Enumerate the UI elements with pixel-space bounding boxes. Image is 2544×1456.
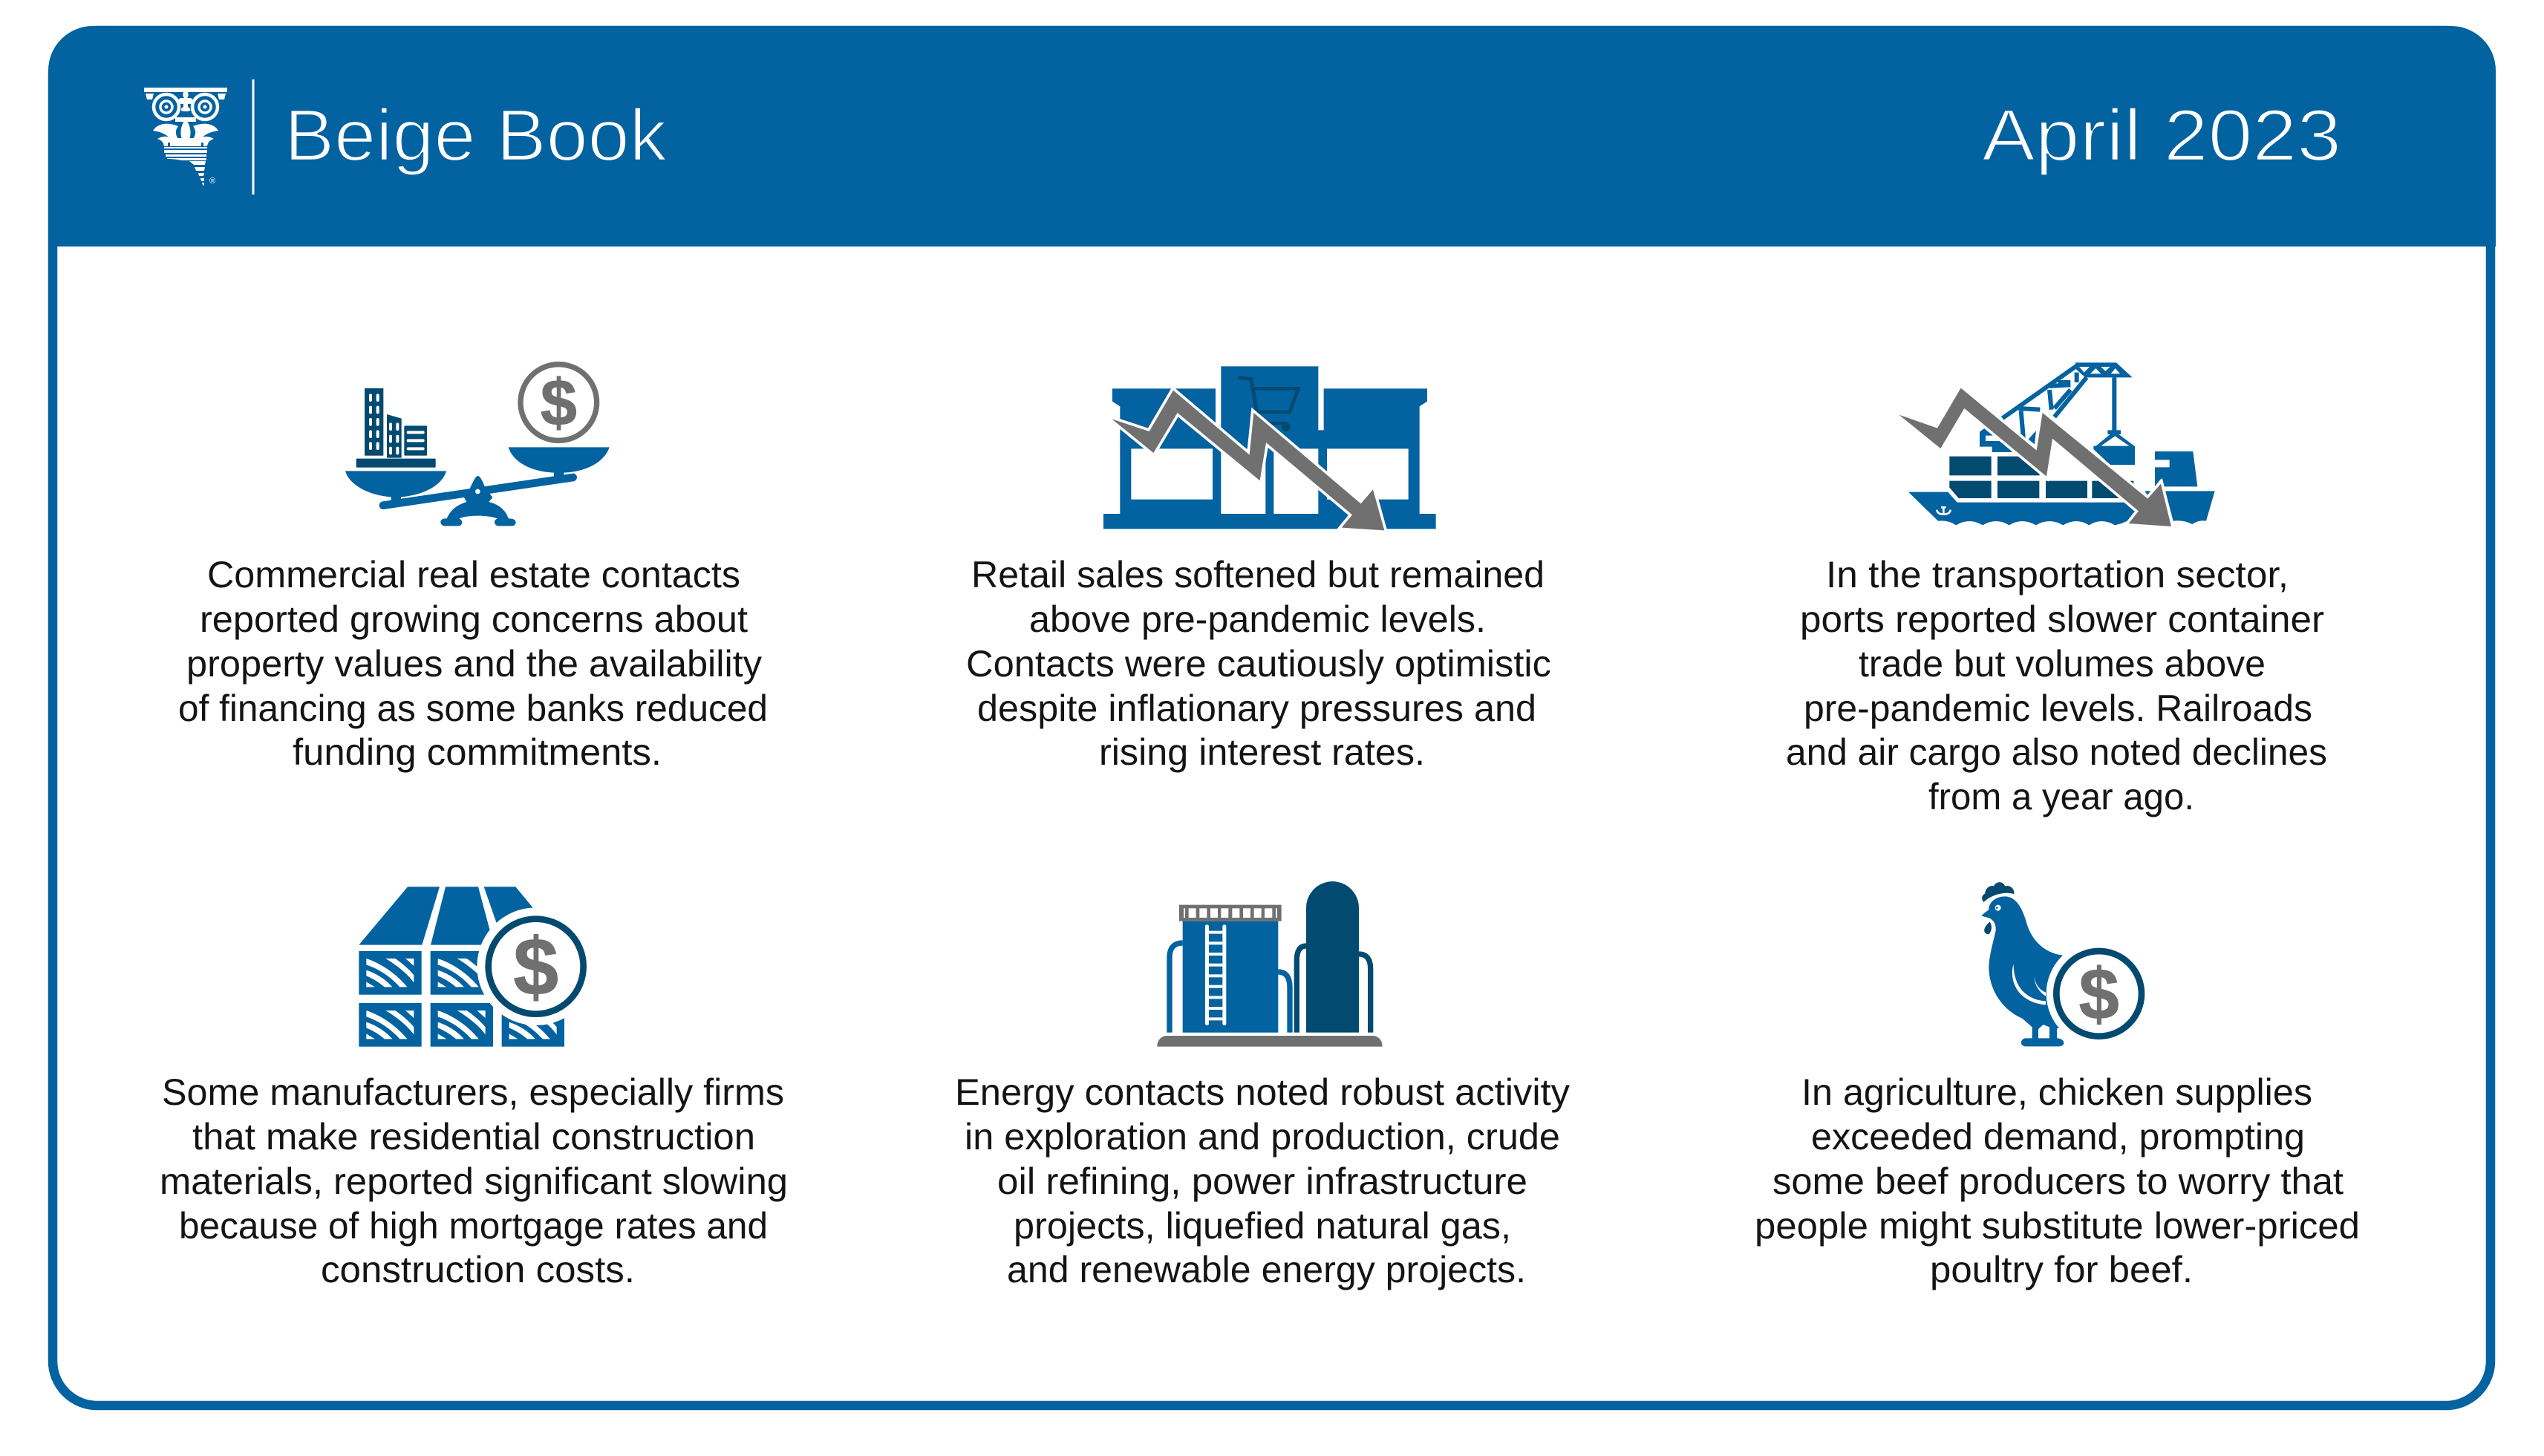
text: retail sales: rising interest rates.: [1099, 731, 1425, 773]
icon: chicken with dollar coin: $: [2079, 954, 2119, 1035]
text: transportation: trade but volumes above: [1859, 643, 2266, 685]
text: retail sales: despite inflationary pressures and: [977, 688, 1536, 729]
text: agriculture: people might substitute lower-priced: [1755, 1205, 2360, 1247]
text: energy: oil refining, power infrastructure: [997, 1160, 1527, 1202]
text: manufacturers: that make residential construction: [192, 1116, 755, 1158]
icon: scale with buildings and dollar coin: $: [541, 366, 577, 440]
text: commercial real estate: funding commitments.: [293, 731, 662, 773]
text: manufacturers: materials, reported significant slowing: [160, 1160, 788, 1202]
icon: refinery tanks: [1157, 881, 1383, 1047]
text: agriculture: exceeded demand, prompting: [1811, 1116, 2305, 1158]
text: agriculture: [1755, 1071, 2360, 1290]
text: manufacturers: construction costs.: [321, 1249, 635, 1290]
text: transportation: pre-pandemic levels. Railroads: [1804, 688, 2312, 729]
text: transportation: In the transportation sector,: [1826, 554, 2289, 595]
text: retail sales: above pre-pandemic levels.: [1029, 598, 1486, 640]
icon: building materials with dollar coin: [359, 887, 595, 1047]
text: agriculture: poultry for beef.: [1930, 1249, 2193, 1290]
text: retail sales: Contacts were cautiously optimistic: [966, 643, 1551, 685]
text: energy: in exploration and production, crude: [965, 1116, 1560, 1158]
text: agriculture: In agriculture, chicken supplies: [1801, 1071, 2312, 1113]
text: commercial real estate: of financing as some banks reduced: [178, 688, 768, 729]
text: manufacturers: [160, 1071, 788, 1290]
text: retail sales: Retail sales softened but remained: [971, 554, 1545, 595]
icon: scale with buildings and dollar coin: [345, 365, 610, 526]
icon: building materials with dollar coin: $: [513, 922, 558, 1013]
text: commercial real estate: [178, 554, 768, 773]
text: commercial real estate: reported growing concerns about: [200, 598, 748, 640]
icon: container ship and crane with falling arrow: [1899, 362, 2215, 526]
logo: column capital: ®: [209, 177, 215, 186]
text: agriculture: some beef producers to worry that: [1772, 1160, 2344, 1202]
text: energy: [955, 1071, 1570, 1290]
icon: chicken with dollar coin: [1981, 882, 2152, 1046]
text: transportation: ports reported slower container: [1800, 598, 2324, 640]
text: transportation: from a year ago.: [1928, 776, 2194, 817]
text: commercial real estate: Commercial real estate contacts: [207, 554, 740, 595]
date: April 2023: [1982, 94, 2341, 176]
text: retail sales: [966, 554, 1551, 773]
header band: [48, 26, 2496, 247]
text: manufacturers: Some manufacturers, especially firms: [162, 1071, 784, 1113]
text: transportation: [1786, 554, 2327, 817]
title: Beige Book: [284, 94, 668, 176]
text: energy: Energy contacts noted robust activity: [955, 1071, 1570, 1113]
text: transportation: and air cargo also noted declines: [1786, 731, 2327, 773]
text: manufacturers: because of high mortgage rates and: [179, 1205, 768, 1247]
logo: column capital: [144, 79, 254, 195]
text: commercial real estate: property values and the availability: [186, 643, 762, 685]
text: energy: projects, liquefied natural gas,: [1014, 1205, 1511, 1247]
text: energy: and renewable energy projects.: [1007, 1249, 1526, 1290]
icon: retail store with falling arrow: [1103, 366, 1436, 530]
